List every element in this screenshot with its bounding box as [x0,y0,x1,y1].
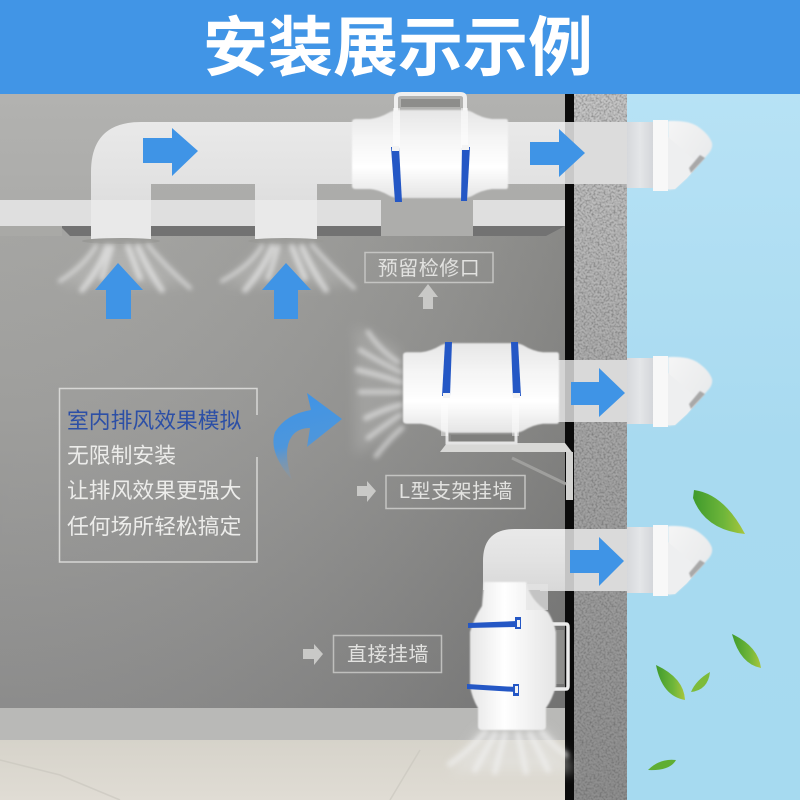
title: 安装展示示例 [203,11,593,84]
fan 2 clear straps [441,396,519,436]
outside sky [627,94,800,800]
arrow: fan 2 exhaust [571,368,625,417]
exhaust hood 2 [627,356,712,427]
duct: middle through-wall pipe [555,360,627,422]
label: reserved access port: 预留检修口 [378,257,480,280]
exhaust hood 3 [627,525,712,596]
info line 1: 室内排风效果模拟 [67,408,242,433]
fan 1 clear straps [393,108,468,148]
info line 4: 任何场所轻松搞定 [67,514,241,539]
room background [0,94,565,800]
fan 2 blue straps [442,342,521,398]
upper wall section [0,94,565,200]
leaf 5 [648,760,676,770]
leaf 3 [656,665,685,700]
arrow: fan 1 exhaust [530,129,585,177]
duct: top run with two ceiling branches [91,122,627,239]
arrow: curved blue airflow [273,393,342,480]
ceiling air spray right [222,238,354,290]
fan 3 handle bracket [545,624,568,689]
floor [0,740,565,800]
arrow: small right to L-bracket label [357,481,376,502]
label: L-bracket wall mount [386,476,525,508]
air spray below fan 3 [450,730,575,772]
leaf 4 [691,672,710,692]
arrow: intake up right [262,263,311,319]
L bracket [440,443,573,500]
arrow: duct flow right [143,128,198,176]
fan 3: direct wall mount vertical [467,582,568,730]
fan 2 lower bracket [447,400,516,444]
exterior wall: black strip [565,94,574,800]
info line 3: 让排风效果更强大 [67,478,241,503]
label: L-bracket wall mount: L型支架挂墙 [399,480,513,503]
arrow: intake up left [95,263,143,319]
arrow: small up to access port [418,284,438,309]
fan 2: L-bracket mounted [403,342,573,500]
arrow: fan 3 exhaust [570,537,624,586]
fan 3 blue straps [467,617,521,696]
baseboard [0,708,565,742]
arrow: small right to direct mount label [303,644,323,665]
duct: lower elbow [483,529,627,591]
leaf 1 [693,490,745,534]
leaf 2 [732,634,761,668]
fan 1 blue straps [391,145,470,202]
fan 1: ceiling inline fan [352,94,508,202]
fan 3 top translucent blend [526,584,548,610]
air spray into fan 2 [355,325,402,456]
title banner [0,0,800,94]
info line 2: 无限制安装 [67,443,176,468]
label: reserved access port [365,252,493,282]
ceiling ledge [0,200,565,236]
fan 1 top bracket [396,94,465,122]
label: direct wall mount [334,636,442,672]
label: direct wall mount: 直接挂墙 [347,643,429,666]
exterior wall: concrete [574,94,627,800]
info text panel [60,388,257,562]
exhaust hood 1 [627,120,712,191]
ceiling air spray left [60,238,190,290]
